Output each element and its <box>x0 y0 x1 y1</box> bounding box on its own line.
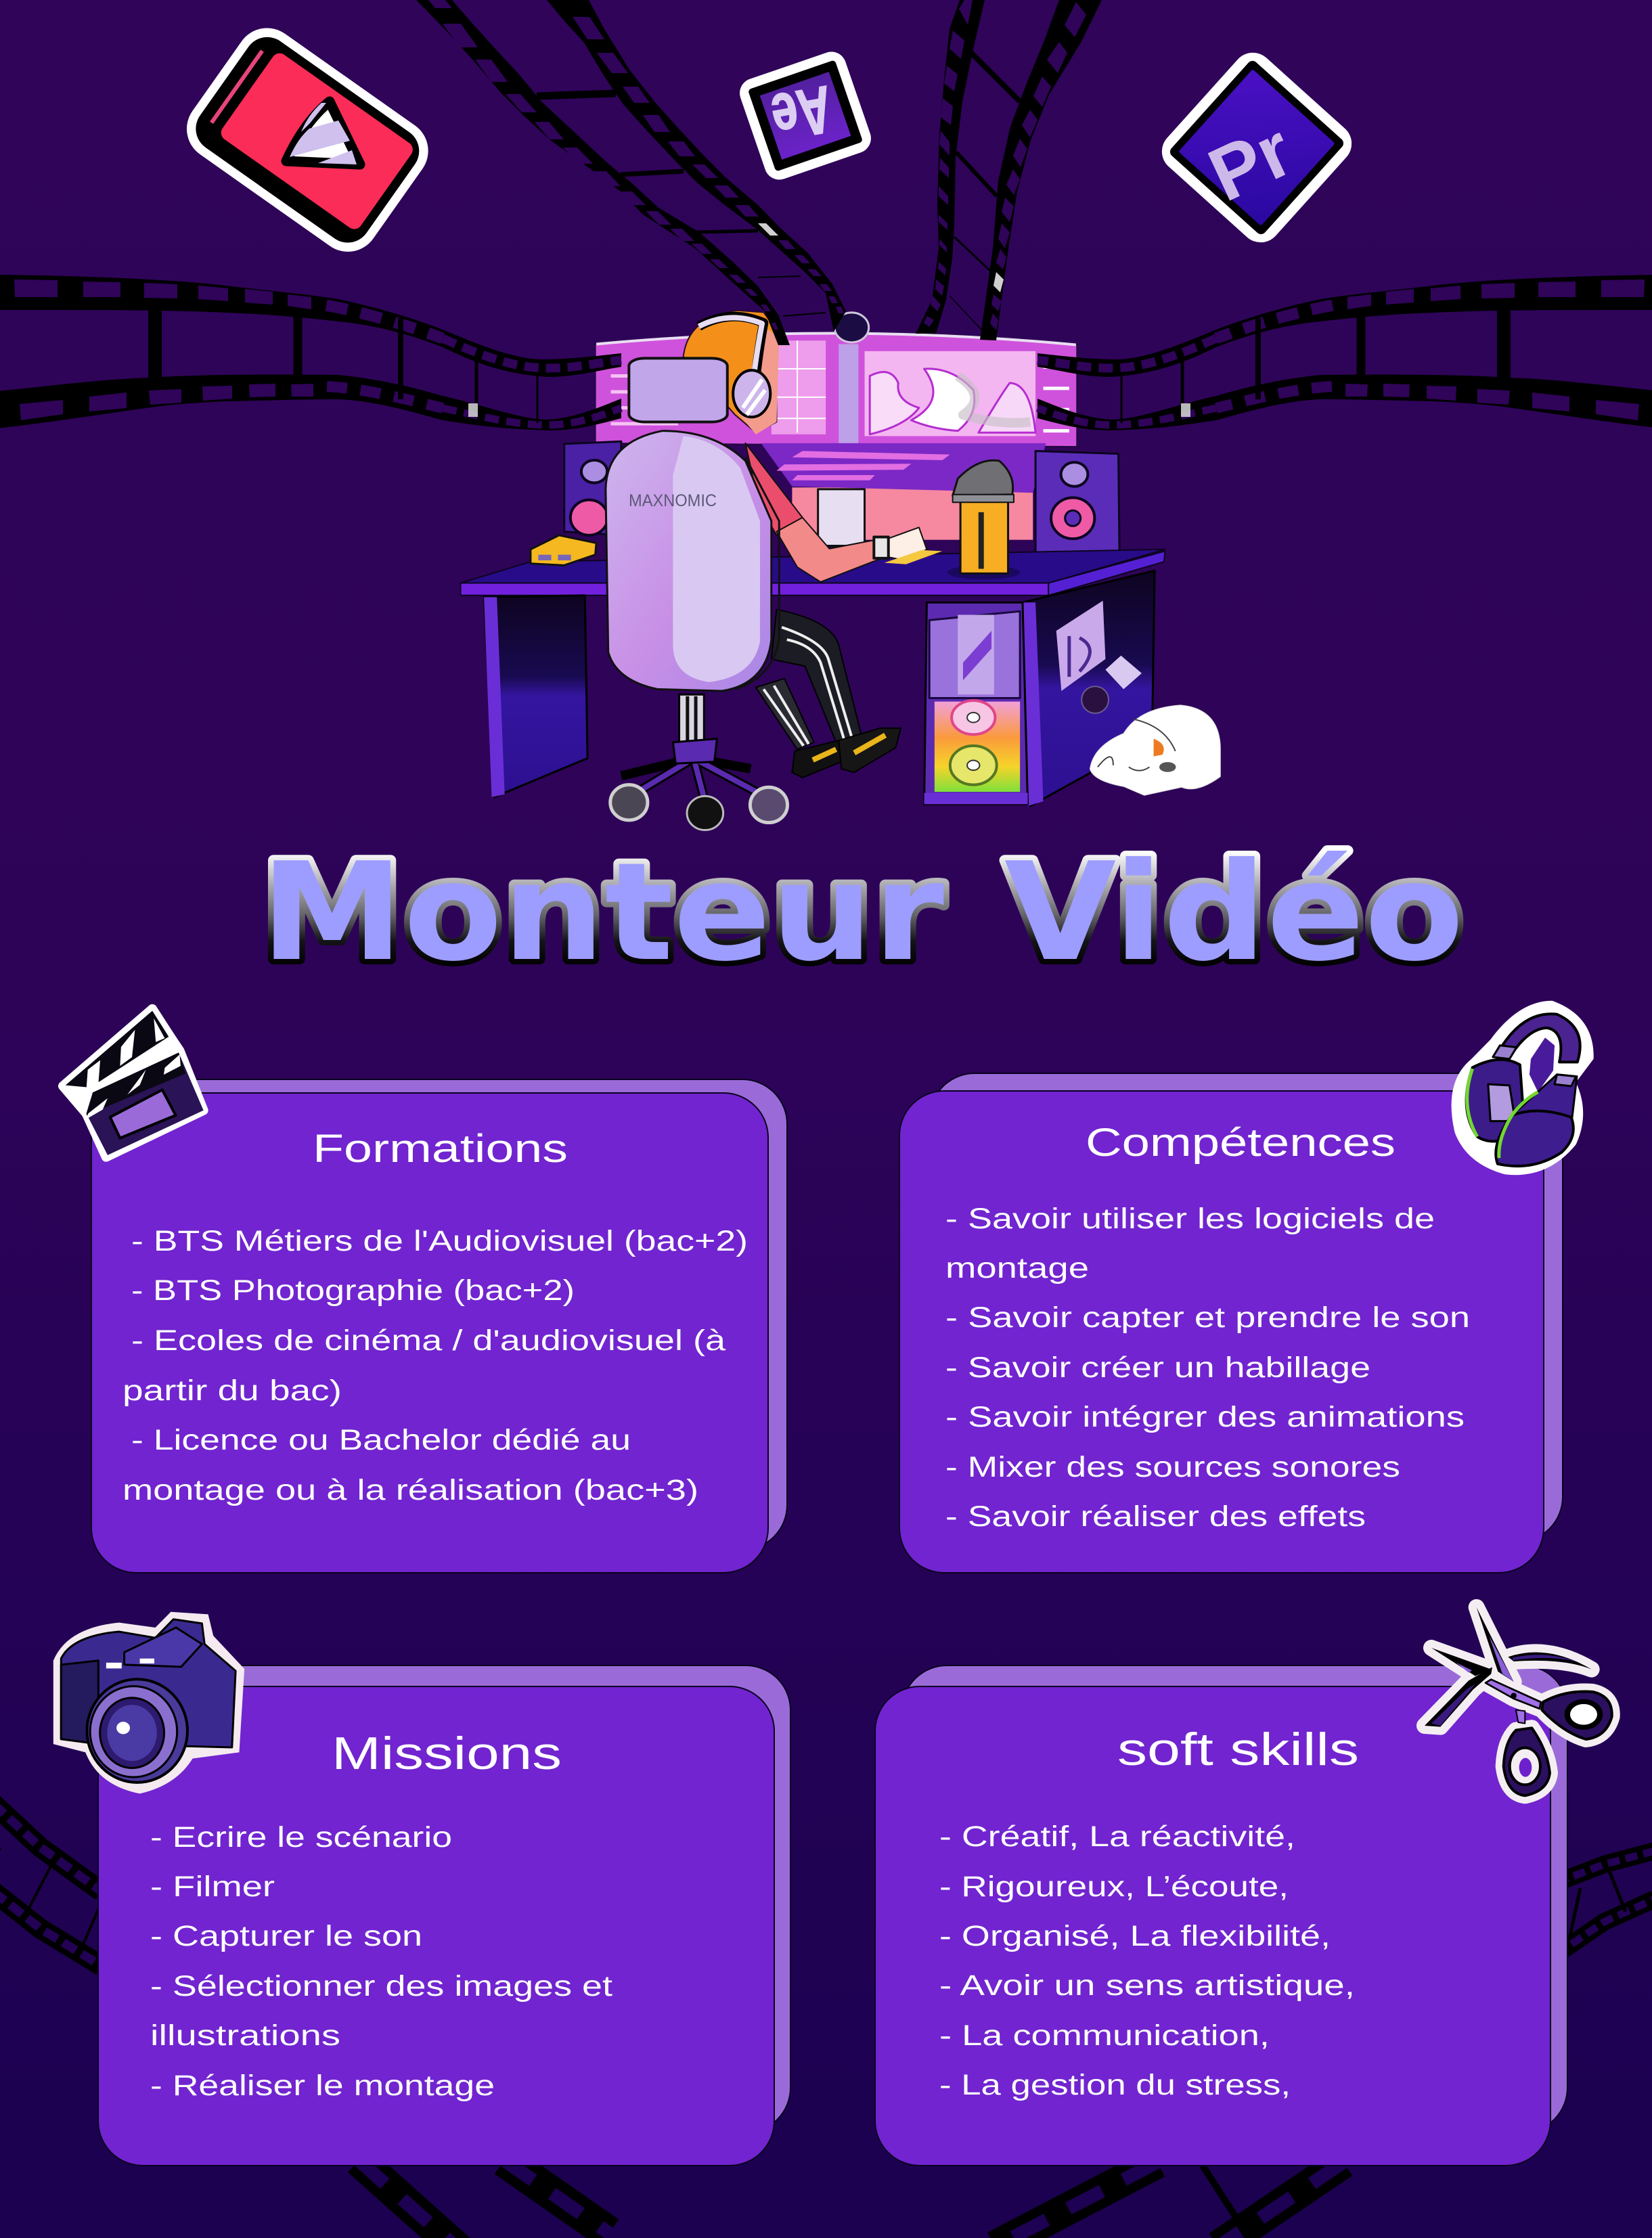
heading: Missions: Missions <box>332 1728 562 1779</box>
left speaker <box>564 441 621 535</box>
icon: camera <box>53 1612 244 1793</box>
title word: Monteur: Monteur <box>261 834 944 991</box>
chair base <box>610 694 788 830</box>
heading: Compétences: Compétences <box>1086 1121 1396 1165</box>
chair back <box>606 358 779 691</box>
heading: soft skills: soft skills <box>1117 1724 1359 1775</box>
text: soft skills list: - Avoir un sens artistique, <box>939 1969 1355 2002</box>
text: soft skills list: - La gestion du stress, <box>939 2069 1291 2101</box>
text: soft skills list: - La communication, <box>939 2019 1270 2052</box>
film strip: bottom right side <box>1557 1851 1652 1954</box>
text: Formations list: partir du bac) <box>122 1374 342 1407</box>
text: Compétences list: - Mixer des sources sonores <box>945 1451 1400 1483</box>
text: Compétences list: - Savoir réaliser des effets <box>945 1500 1366 1533</box>
text: Missions list: - Capturer le son <box>150 1920 422 1952</box>
heading: Formations: Formations <box>313 1127 568 1171</box>
text: Compétences list: - Savoir utiliser les logiciels de <box>945 1203 1435 1235</box>
text: Missions list: illustrations <box>150 2019 340 2052</box>
icon: Premiere <box>1153 44 1360 251</box>
yellow box and mat <box>531 535 942 565</box>
desk <box>461 550 1165 806</box>
film strip: bottom left side <box>0 1804 102 1966</box>
chair brand label: MAXNOMIC <box>629 491 717 510</box>
icon: YouTube <box>175 16 441 264</box>
film strips: bottom centre left <box>359 2160 609 2238</box>
desk illustration <box>461 311 1220 830</box>
panel: Compétences <box>899 1073 1563 1573</box>
text: Formations list: - BTS Photographie (bac+2) <box>131 1274 575 1307</box>
text: soft skills list: - Organisé, La flexibilité, <box>939 1920 1331 1952</box>
film strip: right horizontal <box>1037 275 1652 430</box>
icon: clapperboard <box>63 1009 204 1157</box>
text: Formations list: - BTS Métiers de l'Audiovisuel (bac+2) <box>131 1225 748 1257</box>
text: soft skills list: - Créatif, La réactivité, <box>939 1820 1295 1853</box>
icon: After Effects <box>736 48 875 183</box>
title word: Vidéo: Vidéo <box>1004 834 1464 991</box>
trousers and shoes <box>756 610 901 778</box>
text: Compétences list <box>945 1203 1470 1533</box>
bottle <box>947 460 1020 579</box>
text: Formations list: montage ou à la réalisation (bac+3) <box>122 1474 698 1506</box>
text: Formations list: - Licence ou Bachelor dédié au <box>131 1424 631 1456</box>
monitor <box>596 313 1077 447</box>
film strips: bottom centre right <box>995 2162 1343 2238</box>
icon label: Pr: Pr <box>1197 107 1305 217</box>
computer tower <box>924 602 1028 804</box>
text: Compétences list: - Savoir intégrer des animations <box>945 1401 1465 1433</box>
text: Compétences list: montage <box>945 1252 1089 1284</box>
text: Missions list: - Filmer <box>150 1871 275 1903</box>
text: soft skills list <box>939 1820 1355 2101</box>
text: Missions list: - Ecrire le scénario <box>150 1821 452 1854</box>
film strips: top right pair <box>916 0 1102 340</box>
panel: Missions <box>98 1665 790 2166</box>
panel: soft skills <box>875 1665 1567 2166</box>
right speaker <box>1035 451 1119 555</box>
monitor base <box>761 443 1046 546</box>
text: Formations list <box>122 1225 748 1506</box>
text: Compétences list: - Savoir créer un habillage <box>945 1351 1370 1384</box>
person <box>684 311 927 582</box>
text: Missions list <box>150 1821 612 2102</box>
panel: Formations <box>91 1079 787 1573</box>
icon: headphones <box>1452 1001 1594 1175</box>
film strip: left horizontal <box>0 275 621 430</box>
text: Formations list: - Ecoles de cinéma / d'audiovisuel (à <box>131 1324 725 1357</box>
icon: scissors <box>1425 1607 1612 1795</box>
text: Missions list: - Sélectionner des images et <box>150 1970 612 2002</box>
icon label: Ae: Ae <box>766 72 838 156</box>
text: Compétences list: - Savoir capter et prendre le son <box>945 1301 1470 1334</box>
text: Missions list: - Réaliser le montage <box>150 2069 495 2102</box>
title <box>261 834 1464 991</box>
dog <box>1090 705 1220 795</box>
film strips: top left pair <box>416 0 846 345</box>
text: soft skills list: - Rigoureux, L’écoute, <box>939 1871 1289 1903</box>
